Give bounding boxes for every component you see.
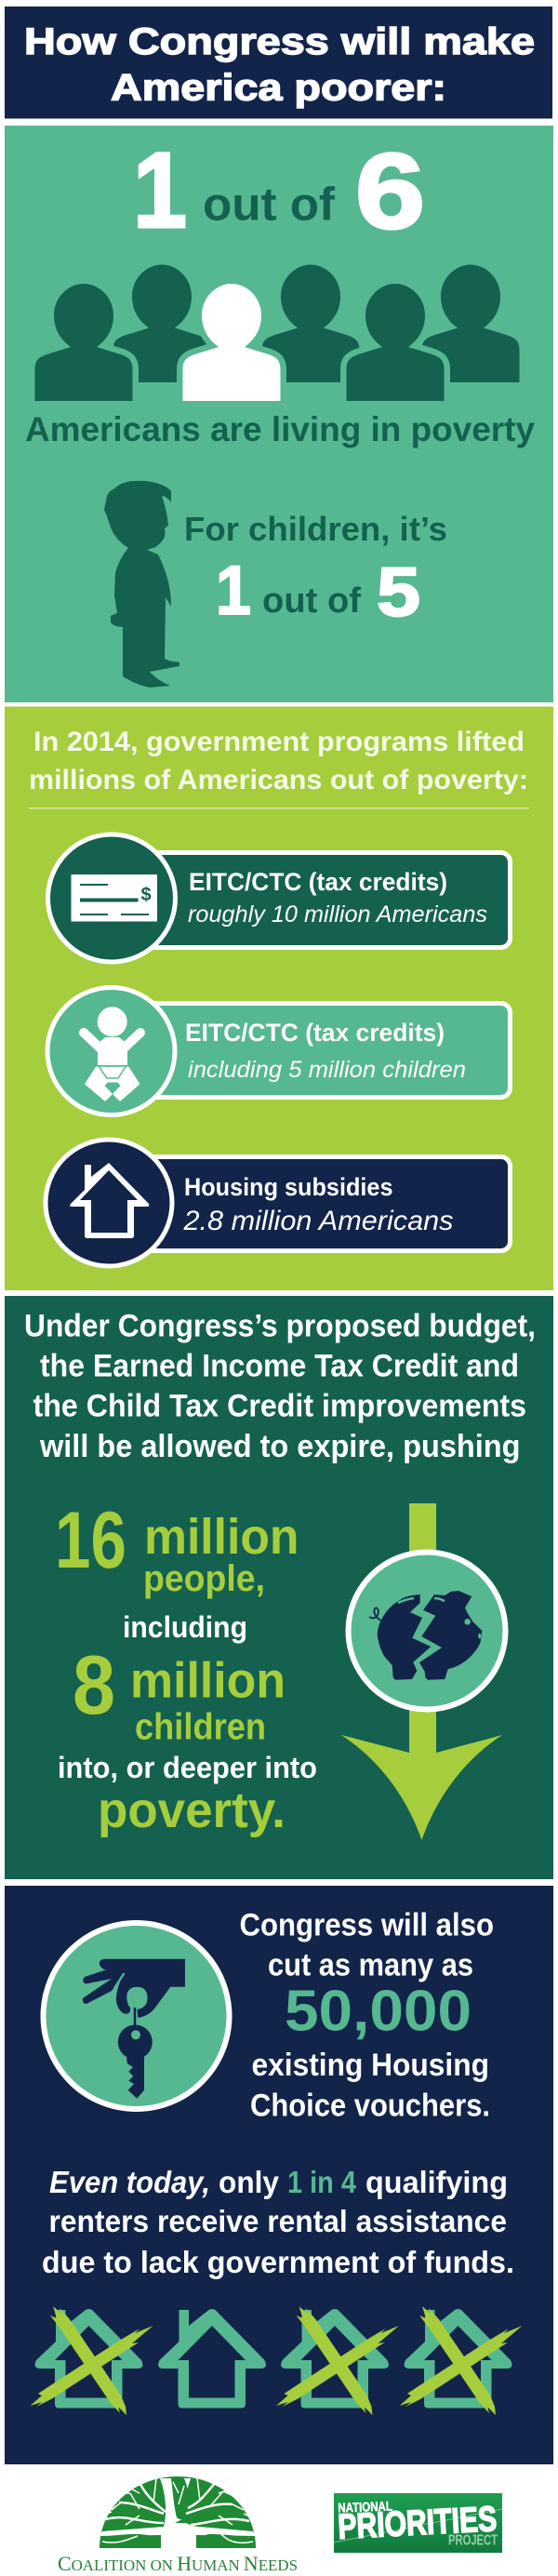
logo: National Priorities Project: PROJECT — [448, 2532, 498, 2549]
icon: house — [70, 1163, 149, 1238]
text: rental assistance: renters receive rental assistance — [48, 2204, 507, 2238]
arrow: downward — [341, 1503, 502, 1840]
row: housing subsidies — [46, 1140, 510, 1266]
statistic: 8 million children — [73, 1639, 286, 1747]
title — [24, 21, 535, 108]
text: for children statistic: out of — [262, 581, 361, 621]
row: tax credits for children — [47, 988, 510, 1114]
text: for children statistic: 1 — [216, 552, 251, 629]
icon: check: $ — [140, 885, 152, 905]
icon: child silhouette — [104, 481, 179, 687]
text: 2.8 million Americans: 2.8 million Americans — [182, 1206, 453, 1236]
text: roughly 10 million Americans: roughly 10 million Americans — [188, 901, 487, 928]
text: including 5 million children: including 5 million children — [188, 1057, 466, 1083]
text: 2.8 million Americans: Housing subsidies — [184, 1173, 392, 1201]
icon: house kept — [158, 2309, 266, 2408]
panel: title banner — [5, 7, 552, 119]
text: voucher cuts: cut as many as — [268, 1948, 473, 1983]
panel: poverty statistics — [5, 126, 553, 702]
text: rental assistance: Even today, — [49, 2165, 210, 2199]
title: America poorer: — [111, 67, 446, 108]
icon: row of six people — [35, 264, 519, 401]
statistic: 1 out of 6 — [133, 131, 425, 251]
text: proposed budget description: Under Congress’s proposed budget, — [24, 1308, 536, 1343]
statistic: 8 million children: children — [135, 1706, 266, 1747]
text: including 5 million children: EITC/CTC (tax credits) — [185, 1019, 445, 1047]
logo: tree — [100, 2476, 256, 2548]
statistic: 1 out of 6: 6 — [355, 132, 425, 251]
heading: programs lifted millions: In 2014, government programs lifted — [33, 727, 525, 757]
icon: crossed-out house 3 — [276, 2306, 399, 2415]
text: voucher cuts — [240, 1907, 494, 2123]
panel: proposed budget — [5, 1296, 553, 1879]
text: rental assistance: only — [219, 2165, 280, 2199]
text: proposed budget description: will be allowed to expire, pushing — [39, 1429, 521, 1464]
text: voucher cuts: existing Housing — [251, 2048, 489, 2083]
statistic: 1 out of 6: 1 — [133, 131, 187, 250]
text: proposed budget description — [24, 1308, 536, 1464]
text: roughly 10 million Americans — [188, 868, 487, 928]
text: Coalition on Human Needs: COALITION ON HUMAN NEEDS — [58, 2552, 298, 2575]
heading: programs lifted millions: millions of Americans out of poverty: — [29, 765, 528, 795]
text: voucher cuts: 50,000 — [285, 1980, 472, 2043]
text: rental assistance: due to lack government of funds. — [42, 2245, 514, 2279]
text: for children statistic — [184, 510, 447, 631]
icon: baby — [84, 1007, 140, 1100]
text: into or deeper into: into, or deeper into — [58, 1751, 317, 1784]
logo: Coalition on Human Needs — [58, 2476, 298, 2575]
text: proposed budget description: the Child Tax Credit improvements — [33, 1388, 526, 1423]
text: rental assistance: qualifying — [365, 2165, 508, 2199]
text: including 5 million children — [185, 1019, 466, 1083]
icon: check — [71, 874, 157, 921]
text: voucher cuts: Choice vouchers. — [250, 2088, 490, 2123]
statistic: 1 out of 6: out of — [203, 179, 335, 231]
text: roughly 10 million Americans: EITC/CTC (tax credits) — [189, 868, 447, 896]
icon: broken piggy bank — [348, 1552, 506, 1710]
statistic: 16 million people: million — [144, 1509, 299, 1565]
statistic: 16 million people: 16 — [55, 1496, 126, 1585]
panel: government programs — [5, 707, 553, 1290]
title: How Congress will make — [24, 21, 535, 62]
statistic: 16 million people — [55, 1496, 299, 1599]
text: voucher cuts: Congress will also — [240, 1907, 494, 1942]
text: for children statistic: For children, it’s — [184, 510, 447, 548]
logo: National Priorities Project: NATIONAL — [338, 2498, 392, 2515]
row: tax credits for Americans — [48, 834, 510, 962]
text: Americans are living in poverty: Americans are living in poverty — [25, 410, 535, 448]
icon: crossed-out house 4 — [400, 2306, 523, 2415]
text: proposed budget description: the Earned Income Tax Credit and — [40, 1349, 519, 1384]
statistic: 8 million children: million — [130, 1652, 286, 1708]
logo: National Priorities Project — [334, 2493, 502, 2553]
text: rental assistance — [42, 2165, 514, 2279]
panel: housing vouchers — [5, 1886, 553, 2464]
heading: programs lifted millions — [29, 727, 528, 795]
icon: crossed-out house 1 — [30, 2306, 153, 2415]
icon: hand holding key — [43, 1923, 229, 2109]
text: including: including — [123, 1610, 247, 1644]
text: poverty: poverty. — [98, 1782, 286, 1838]
text: rental assistance: 1 in 4 — [287, 2165, 357, 2199]
statistic: 8 million children: 8 — [73, 1639, 115, 1732]
logo: National Priorities Project: PRIORITIES — [337, 2500, 498, 2547]
text: 2.8 million Americans — [182, 1173, 453, 1236]
text: for children statistic: 5 — [377, 554, 420, 631]
statistic: 16 million people: people, — [143, 1558, 265, 1599]
